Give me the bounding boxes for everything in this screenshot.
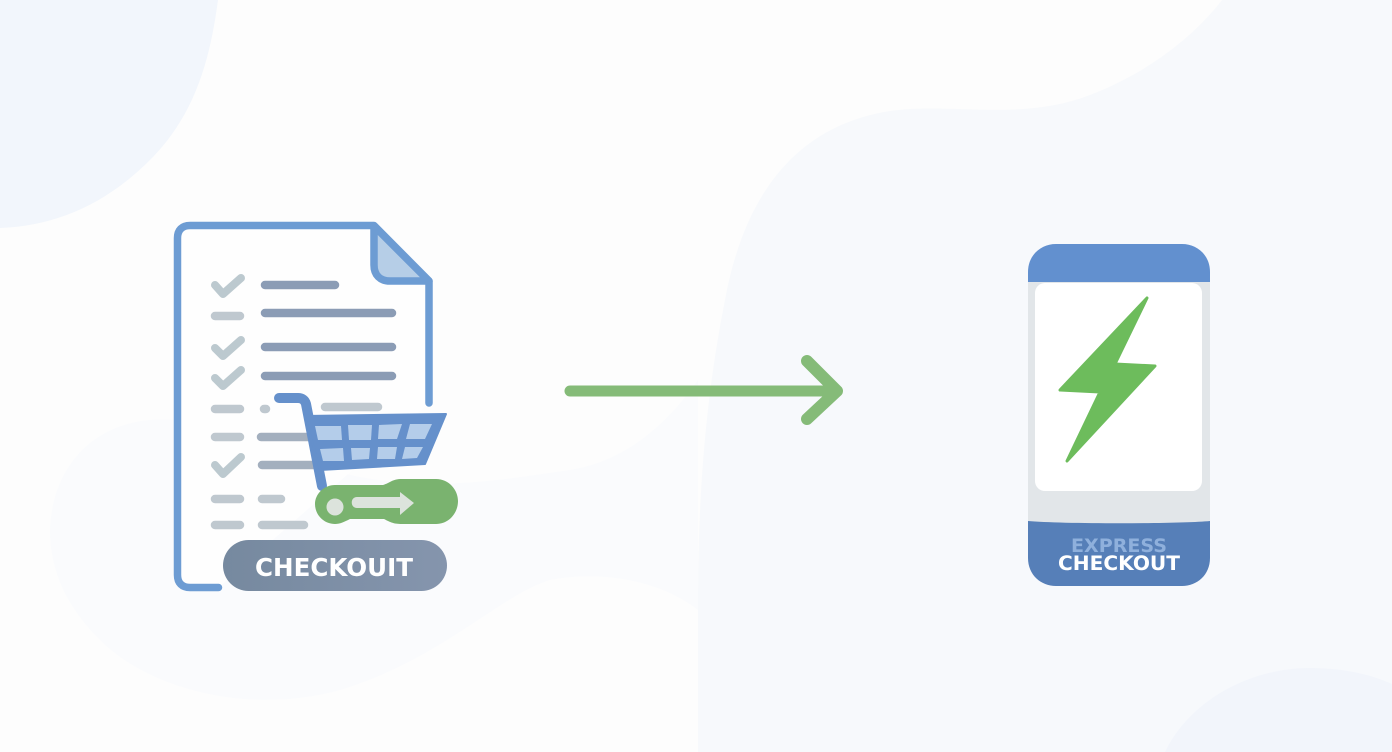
icon: shopping cart: [279, 398, 446, 486]
checkout label: CHECKOUT: [1058, 552, 1181, 575]
panel: long checkout form document: [178, 226, 429, 588]
checkout label pill: [223, 540, 447, 591]
express label: EXPRESS: [1071, 535, 1167, 557]
checkout label pill: CHECKOUIT: [255, 553, 413, 582]
phone screen: [1035, 283, 1202, 491]
document outline: [178, 226, 429, 588]
arrow: [570, 361, 837, 419]
icon: lightning bolt: [1060, 298, 1155, 461]
icon: green checkout tag with arrow: [315, 479, 458, 524]
page fold: [374, 226, 429, 281]
panel: express checkout phone: [1028, 244, 1210, 586]
phone body: [1028, 270, 1210, 540]
checklist rows: [215, 278, 392, 525]
phone top band: [1028, 244, 1210, 282]
phone bottom band: [1028, 521, 1210, 586]
